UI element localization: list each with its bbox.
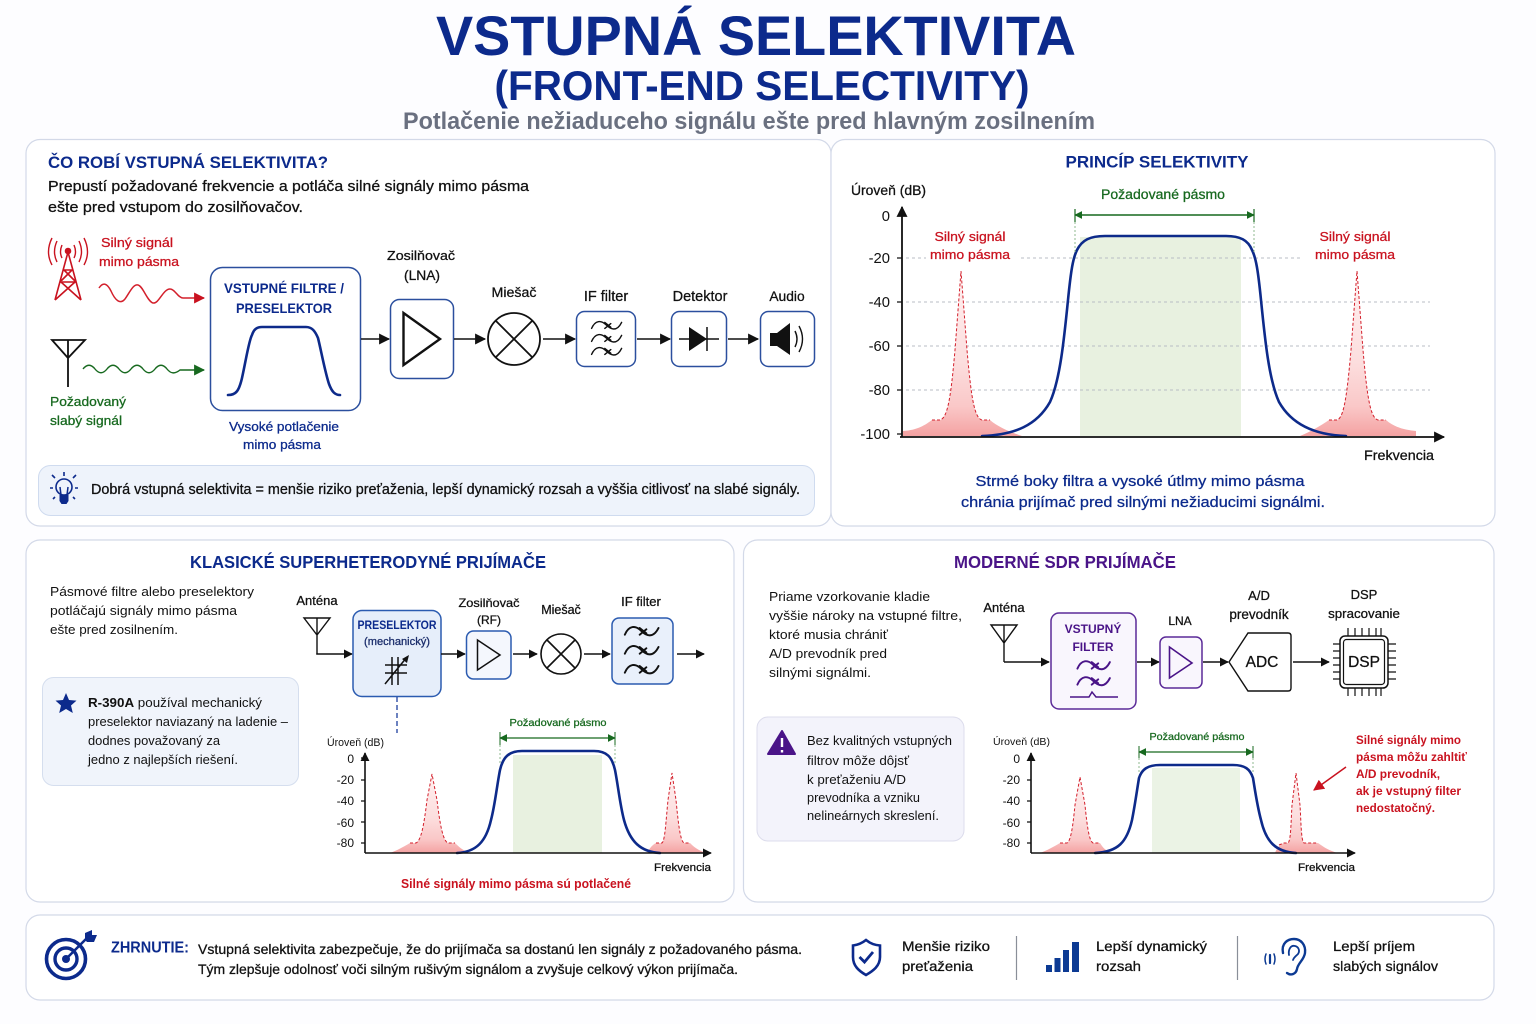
- heading: PRINCÍP SELEKTIVITY: [1066, 152, 1249, 172]
- strong signal label: mimo pásma: [99, 254, 180, 269]
- description: Priame vzorkovanie kladie: [769, 589, 930, 604]
- right peak label: [1315, 229, 1396, 262]
- ADC label: [1229, 588, 1289, 622]
- right suppressed peak: [647, 773, 707, 853]
- ticks: [1027, 780, 1031, 843]
- y axis ticks: [897, 258, 902, 434]
- LNA label: LNA: [1168, 614, 1192, 628]
- x axis title: Frekvencia: [1298, 862, 1356, 874]
- axes: [1031, 753, 1355, 853]
- warning note: pásma môžu zahltiť: [1356, 752, 1467, 764]
- axes: [365, 753, 711, 853]
- input filter block: VSTUPNÝ: [1065, 621, 1121, 636]
- benefit: less overload: Menšie riziko: [902, 938, 990, 954]
- DSP label: DSP: [1351, 587, 1377, 602]
- ADC label: A/D: [1248, 588, 1270, 603]
- band label: Požadované pásmo: [510, 717, 607, 729]
- arrow: [361, 338, 389, 340]
- DSP chip: DSP: [1348, 654, 1380, 671]
- filter caption: Vysoké potlačenie: [229, 419, 339, 434]
- arrow: [1293, 661, 1329, 663]
- chart: right interferer peak: [1300, 271, 1416, 436]
- y axis labels: -20: [869, 251, 890, 267]
- red warning arrow: [1314, 767, 1346, 790]
- y labels: [337, 752, 354, 850]
- chart: axes: [900, 207, 1444, 437]
- callout: R-390A: [42, 678, 298, 786]
- y axis labels: -40: [869, 295, 890, 311]
- arrow: [1203, 661, 1228, 663]
- heading: KLASICKÉ SUPERHETERODYNÉ PRIJÍMAČE: [190, 551, 546, 572]
- right peak label: mimo pásma: [1315, 247, 1396, 262]
- summary text: [198, 941, 802, 977]
- left peak label: mimo pásma: [930, 247, 1011, 262]
- callout: R-390A: dodnes považovaný za: [88, 733, 221, 748]
- RF amp label: (RF): [477, 613, 501, 627]
- benefit: better weak signal reception: Lepší príjem: [1333, 938, 1415, 954]
- description: Pásmové filtre alebo preselektory: [50, 584, 254, 599]
- arrow: [728, 338, 758, 340]
- title: VSTUPNÁ SELEKTIVITA: [436, 4, 1076, 67]
- band label: Požadované pásmo: [1101, 187, 1225, 202]
- chart caption: Strmé boky filtra a vysoké útlmy mimo pásma: [976, 473, 1305, 490]
- LNA label: [387, 248, 455, 283]
- chart note: Silné signály mimo pásma sú potlačené: [401, 877, 631, 891]
- LNA block: [1160, 637, 1202, 688]
- arrow: [584, 653, 610, 655]
- RF amp label: Zosilňovač: [458, 596, 520, 610]
- callout: warning: [757, 717, 964, 841]
- description: potláčajú signály mimo pásma: [50, 603, 238, 618]
- warning note: [1356, 735, 1467, 815]
- icon: bars: [1046, 942, 1079, 972]
- red interference wave arrow: [99, 284, 204, 303]
- wanted signal label: Požadovaný: [50, 394, 126, 409]
- panel: modern SDR receivers: [744, 540, 1494, 902]
- subtitle: (FRONT-END SELECTIVITY): [494, 62, 1030, 109]
- y labels: -80: [337, 836, 354, 850]
- arrow: [1004, 661, 1049, 663]
- callout: selectivity benefit: [38, 466, 814, 516]
- icon: target: [46, 930, 97, 978]
- arrow: [441, 653, 465, 655]
- callout: warning: nelineárnych skreslení.: [807, 809, 939, 823]
- mixer symbol: [488, 313, 540, 365]
- y labels: 0: [1013, 752, 1020, 766]
- arrow: [637, 338, 670, 340]
- IF filter block: [576, 312, 636, 366]
- input filter block: [1051, 613, 1136, 709]
- panel: summary: [26, 915, 1494, 1000]
- callout: warning: k preťaženiu A/D: [807, 773, 906, 787]
- mixer symbol: [541, 634, 581, 674]
- warning note: ak je vstupný filter: [1356, 786, 1462, 798]
- LNA label: Zosilňovač: [387, 248, 455, 263]
- chart: left interferer peak: [903, 271, 1022, 436]
- IF filter block: [612, 618, 673, 684]
- benefit: better weak signal reception: [1333, 938, 1438, 974]
- left peak label: [930, 229, 1011, 262]
- antenna label: Anténa: [983, 600, 1025, 615]
- chart: superheterodyne response: [327, 717, 712, 874]
- panel: selectivity principle: [831, 140, 1495, 526]
- description: ešte pred zosilnením.: [50, 622, 178, 637]
- detector block: [672, 312, 726, 366]
- y axis labels: -80: [869, 383, 890, 399]
- filter caption: mimo pásma: [243, 437, 322, 452]
- heading: ČO ROBÍ VSTUPNÁ SELEKTIVITA?: [48, 153, 328, 172]
- band arrow: [1139, 746, 1253, 772]
- input filter block: FILTER: [1072, 640, 1114, 654]
- y axis labels: -100: [860, 427, 890, 443]
- description: ktoré musia chrániť: [769, 627, 889, 642]
- preselector block: (mechanický): [364, 636, 430, 648]
- IF filter label: IF filter: [621, 594, 662, 609]
- callout: R-390A: preselektor naviazaný na ladenie –: [88, 714, 289, 729]
- band arrow: [500, 732, 615, 765]
- callout: warning: prevodníka a vzniku: [807, 791, 920, 805]
- y axis labels: -60: [869, 339, 890, 355]
- ticks: [361, 758, 365, 843]
- wanted signal label: slabý signál: [50, 413, 122, 428]
- y labels: 0: [347, 752, 354, 766]
- summary text: Vstupná selektivita zabezpečuje, že do prijímača sa dostanú len signály z požadovaného pásma.: [198, 941, 802, 957]
- summary label: ZHRNUTIE:: [111, 940, 189, 956]
- description: [50, 584, 254, 637]
- callout: R-390A: jedno z najlepších riešení.: [87, 752, 238, 767]
- LNA label: (LNA): [404, 268, 440, 283]
- icon: red transmitter tower: [48, 238, 88, 300]
- y labels: [1003, 752, 1020, 850]
- main chart: [851, 183, 1444, 463]
- x axis title: Frekvencia: [654, 862, 712, 874]
- arrow: [317, 653, 352, 654]
- benefit: better dynamic range: [1096, 938, 1207, 974]
- y labels: -60: [337, 816, 354, 830]
- icon: shield: [853, 940, 880, 975]
- right strong peak: [1275, 773, 1338, 853]
- y labels: -40: [337, 794, 354, 808]
- heading: MODERNÉ SDR PRIJÍMAČE: [954, 551, 1176, 572]
- ADC label: prevodník: [1229, 607, 1289, 622]
- benefit: better dynamic range: rozsah: [1096, 958, 1141, 974]
- description: A/D prevodník pred: [769, 646, 887, 661]
- icon: warning triangle: [768, 731, 795, 754]
- left peak label: Silný signál: [934, 229, 1006, 244]
- chart caption: chránia prijímač pred silnými nežiaducimi signálmi.: [961, 494, 1325, 511]
- ADC block: ADC: [1246, 654, 1278, 671]
- antenna label: Anténa: [296, 593, 338, 608]
- arrow: [543, 338, 575, 340]
- description: vyššie nároky na vstupné filtre,: [769, 608, 962, 623]
- summary text: Tým zlepšuje odolnosť voči silným rušivým signálom a zvyšuje celkový výkon prijímača.: [198, 961, 738, 977]
- band arrow: [1075, 209, 1254, 252]
- y axis labels: [860, 209, 890, 443]
- arrow: [454, 338, 485, 340]
- y labels: -20: [1003, 773, 1020, 787]
- callout: warning: Bez kvalitných vstupných: [807, 734, 952, 748]
- input filter block: [210, 268, 360, 410]
- y labels: -20: [337, 773, 354, 787]
- left suppressed peak: [390, 774, 470, 853]
- warning note: A/D prevodník,: [1356, 769, 1440, 781]
- warning note: nedostatočný.: [1356, 803, 1435, 815]
- callout: selectivity benefit: Dobrá vstupná selektivita = menšie riziko preťaženia, lepší dynamický rozsah a vyššia citlivosť na slabé signály.: [91, 482, 800, 498]
- y axis title: Úroveň (dB): [327, 736, 384, 749]
- input filter block: PRESELEKTOR: [236, 300, 332, 316]
- ADC block: [1229, 633, 1291, 691]
- filter curve: [1095, 765, 1296, 853]
- left strong peak: [1040, 777, 1112, 853]
- preselector block: [353, 610, 441, 696]
- icon: antenna: [52, 340, 85, 387]
- arrow: [677, 653, 704, 655]
- benefit: better weak signal reception: slabých signálov: [1333, 958, 1438, 974]
- arrow: [1137, 661, 1159, 663]
- benefit: less overload: preťaženia: [902, 958, 973, 974]
- LNA block: [390, 300, 454, 378]
- detector label: Detektor: [673, 289, 728, 305]
- mechanical tuning link: [396, 697, 398, 733]
- benefit: better dynamic range: Lepší dynamický: [1096, 938, 1207, 954]
- tagline: Potlačenie nežiaduceho signálu ešte pred hlavným zosilnením: [403, 108, 1095, 135]
- description: Prepustí požadované frekvencie a potláča silné signály mimo pásma: [48, 178, 530, 195]
- y labels: -40: [1003, 794, 1020, 808]
- DSP label: [1328, 587, 1400, 621]
- description: ešte pred vstupom do zosilňovačov.: [48, 199, 303, 216]
- icon: star: [56, 693, 76, 713]
- chart caption: [961, 473, 1325, 511]
- description: silnými signálmi.: [769, 665, 871, 680]
- icon: light bulb: [50, 472, 78, 504]
- preselector block: PRESELEKTOR: [358, 620, 437, 632]
- audio label: Audio: [769, 289, 805, 304]
- filter curve: [457, 751, 660, 853]
- strong signal label: Silný signál: [101, 235, 173, 250]
- panel: what front-end selectivity does: [26, 140, 831, 526]
- right peak label: Silný signál: [1320, 229, 1391, 244]
- band label: Požadované pásmo: [1150, 731, 1245, 743]
- chart: pass band shading: [1080, 237, 1241, 436]
- callout: R-390A: R-390A používal mechanický: [88, 695, 263, 710]
- panel: classic superheterodyne receivers: [26, 540, 734, 902]
- callout: warning: filtrov môže dôjsť: [807, 754, 909, 768]
- benefit: less overload: [902, 938, 990, 974]
- DSP chip: [1333, 628, 1396, 696]
- icon: antenna: [991, 625, 1017, 662]
- RF amp block: [466, 631, 511, 679]
- chart: SDR response: [993, 731, 1356, 874]
- y axis title: Úroveň (dB): [993, 735, 1050, 748]
- wanted signal label: [50, 394, 126, 428]
- y labels: -80: [1003, 836, 1020, 850]
- y axis labels: 0: [882, 209, 890, 225]
- audio block: [760, 312, 814, 366]
- description: [769, 589, 962, 680]
- description: [48, 178, 530, 216]
- mixer label: Miešač: [541, 603, 581, 617]
- icon: antenna: [304, 618, 330, 653]
- arrow: [513, 653, 537, 655]
- chart: filter response curve: [982, 236, 1346, 436]
- y labels: -60: [1003, 816, 1020, 830]
- x axis title: Frekvencia: [1364, 448, 1435, 463]
- input filter block: VSTUPNÉ FILTRE /: [224, 280, 344, 296]
- icon: ear with sound: [1265, 939, 1305, 974]
- filter caption: [229, 419, 339, 452]
- warning note: Silné signály mimo: [1356, 735, 1461, 747]
- strong signal label: [99, 235, 180, 269]
- IF filter label: IF filter: [584, 289, 628, 305]
- y axis title: Úroveň (dB): [851, 183, 926, 198]
- green weak signal wave arrow: [83, 365, 204, 373]
- DSP label: spracovanie: [1328, 606, 1400, 621]
- mixer label: Miešač: [492, 285, 536, 301]
- RF amp label: [458, 596, 520, 627]
